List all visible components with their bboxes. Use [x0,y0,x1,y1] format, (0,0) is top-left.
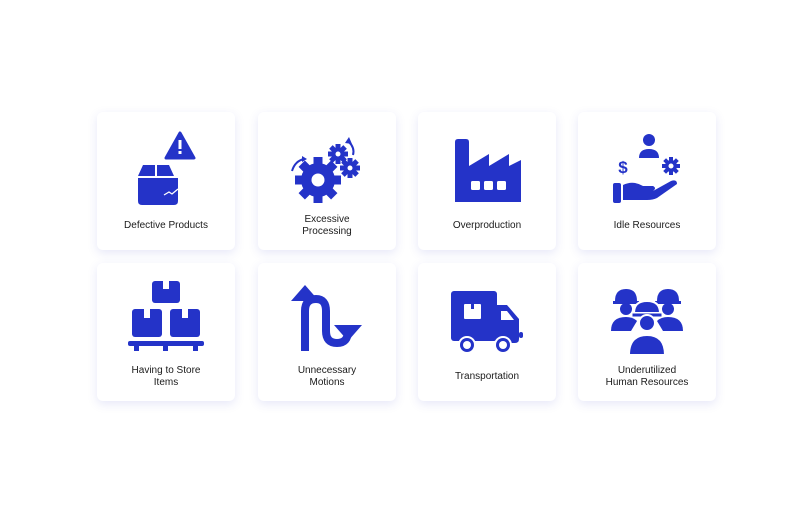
icon: boxes on pallet [128,281,204,351]
label [606,365,688,388]
label: Having to Store [132,365,200,376]
label: Processing [302,226,352,237]
card: overproduction [418,112,556,250]
card: transportation [418,263,556,401]
label [132,365,200,388]
card: unnecessary motions [258,263,396,401]
label: Overproduction [453,220,521,231]
icon: hand with person, dollar, gear: $ [618,158,628,177]
label: Items [154,377,178,388]
label: Human Resources [606,377,688,388]
card: excessive processing [258,112,396,250]
card: having to store items [97,263,235,401]
label: Unnecessary [298,365,356,376]
label: Transportation [455,371,519,382]
icon: workers with helmets [611,289,683,354]
label: Motions [309,377,344,388]
card: defective products [97,112,235,250]
icon: damaged box with warning [138,131,196,205]
label [302,214,352,237]
label: Underutilized [618,365,676,376]
label: Idle Resources [614,220,680,231]
label [298,365,356,388]
card: underutilized human resources [578,263,716,401]
icon: up-down arrows [291,285,362,351]
label: Excessive [304,214,350,225]
card: idle resources [578,112,716,250]
label: Defective Products [124,220,208,231]
icon: hand with person, dollar, gear [613,134,680,203]
icon: gears [291,137,360,203]
icon: factory [455,139,521,202]
icon: truck [451,291,523,352]
